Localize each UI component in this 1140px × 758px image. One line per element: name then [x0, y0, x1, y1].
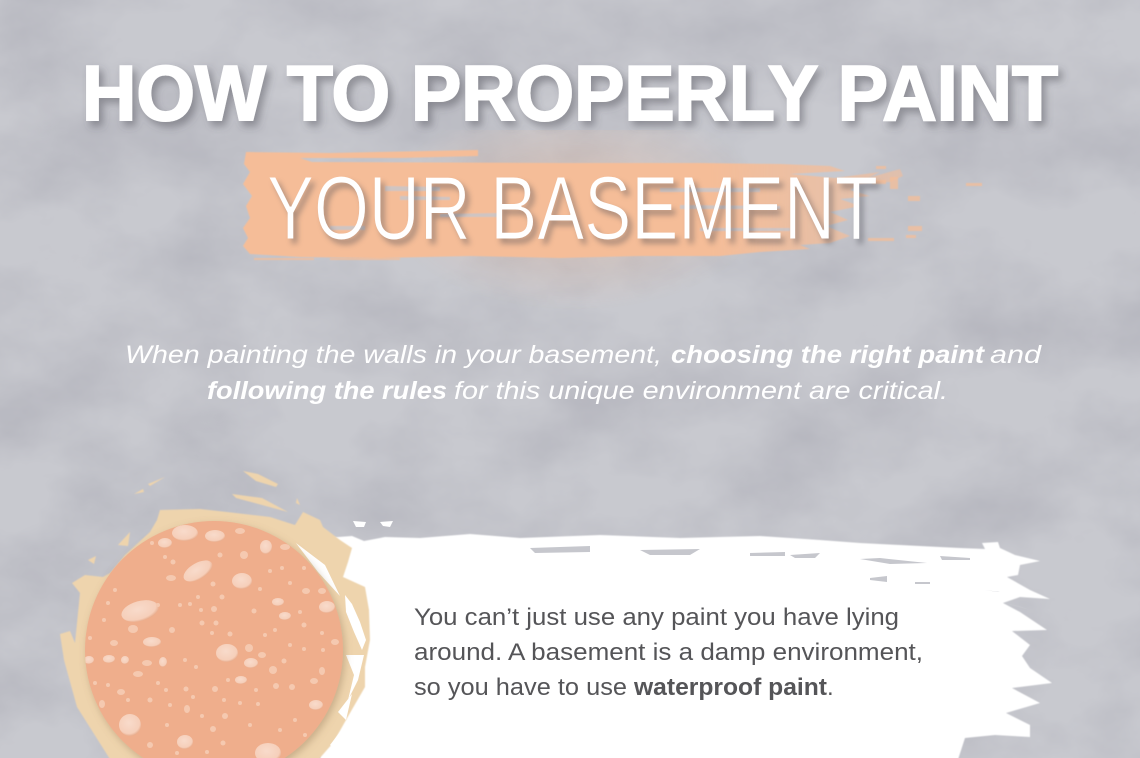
- intro paragraph: and: [990, 341, 1042, 369]
- peach disc with water drops: [84, 521, 343, 758]
- paint splash ring and droplet disc: [60, 471, 370, 758]
- large droplets: [84, 525, 335, 758]
- intro paragraph: [125, 341, 1042, 405]
- body text: .: [827, 674, 834, 701]
- cream paint splash: [60, 471, 370, 758]
- body text: You can’t just use any paint you have lying: [414, 604, 899, 631]
- subtitle line 2: YOUR BASEMENT: [267, 159, 878, 259]
- white brush stroke panel: [320, 521, 1052, 758]
- small droplets: [88, 528, 339, 755]
- intro paragraph: for this unique environment are critical.: [454, 377, 948, 405]
- white gaps in splash: [296, 543, 366, 750]
- body text: [414, 604, 923, 701]
- body text: so you have to use: [414, 674, 627, 701]
- intro paragraph: When painting the walls in your basement,: [125, 341, 662, 369]
- peach brush stroke behind subtitle: [243, 100, 982, 310]
- intro paragraph: following the rules: [207, 377, 447, 405]
- intro paragraph: choosing the right paint: [671, 341, 986, 369]
- body text: waterproof paint: [633, 674, 827, 701]
- body text: around. A basement is a damp environment,: [414, 639, 923, 666]
- title line 1: HOW TO PROPERLY PAINT: [82, 49, 1058, 137]
